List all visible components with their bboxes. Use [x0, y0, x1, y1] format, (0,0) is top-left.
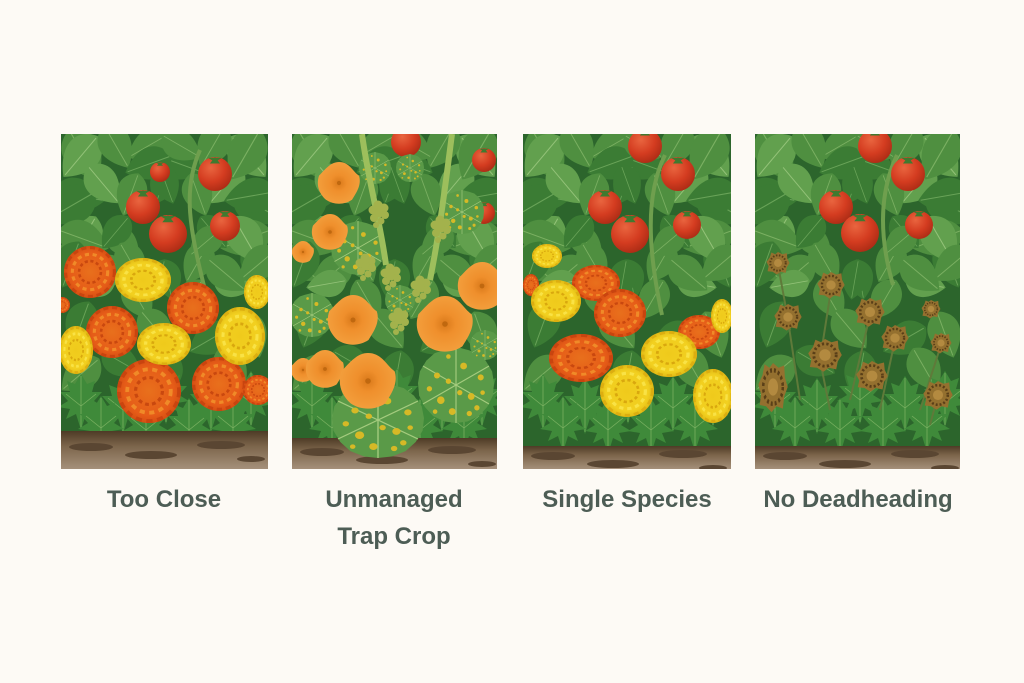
label: unmanaged trap crop: Trap Crop [337, 523, 451, 550]
label: too close: Too Close [107, 486, 221, 513]
tomatoes [819, 129, 933, 252]
panel: too close [61, 134, 268, 469]
soil strip [755, 446, 960, 471]
label: no deadheading: No Deadheading [763, 486, 953, 513]
label: unmanaged trap crop: Unmanaged [325, 486, 463, 513]
nasturtium blooms [291, 162, 506, 409]
spent flower heads [758, 252, 953, 412]
aphid clusters [356, 200, 451, 335]
spent flower stems [778, 265, 941, 425]
panel: single species [523, 134, 731, 469]
marigolds [523, 244, 733, 423]
tomato stem [651, 155, 665, 315]
soil strip [523, 446, 731, 471]
panel: no deadheading [755, 134, 960, 469]
tomatoes [588, 129, 701, 253]
tomatoes [391, 127, 496, 224]
tomato stem [883, 155, 897, 285]
tomato stem [190, 150, 205, 290]
tomatoes [126, 157, 240, 253]
label: single species: Single Species [542, 486, 712, 513]
panel: unmanaged trap crop [292, 134, 497, 469]
stems [362, 134, 452, 280]
infested leaves [290, 152, 500, 458]
infographic canvas [61, 134, 960, 549]
soil strip [61, 431, 268, 469]
marigolds [54, 246, 273, 423]
soil strip [292, 438, 497, 469]
